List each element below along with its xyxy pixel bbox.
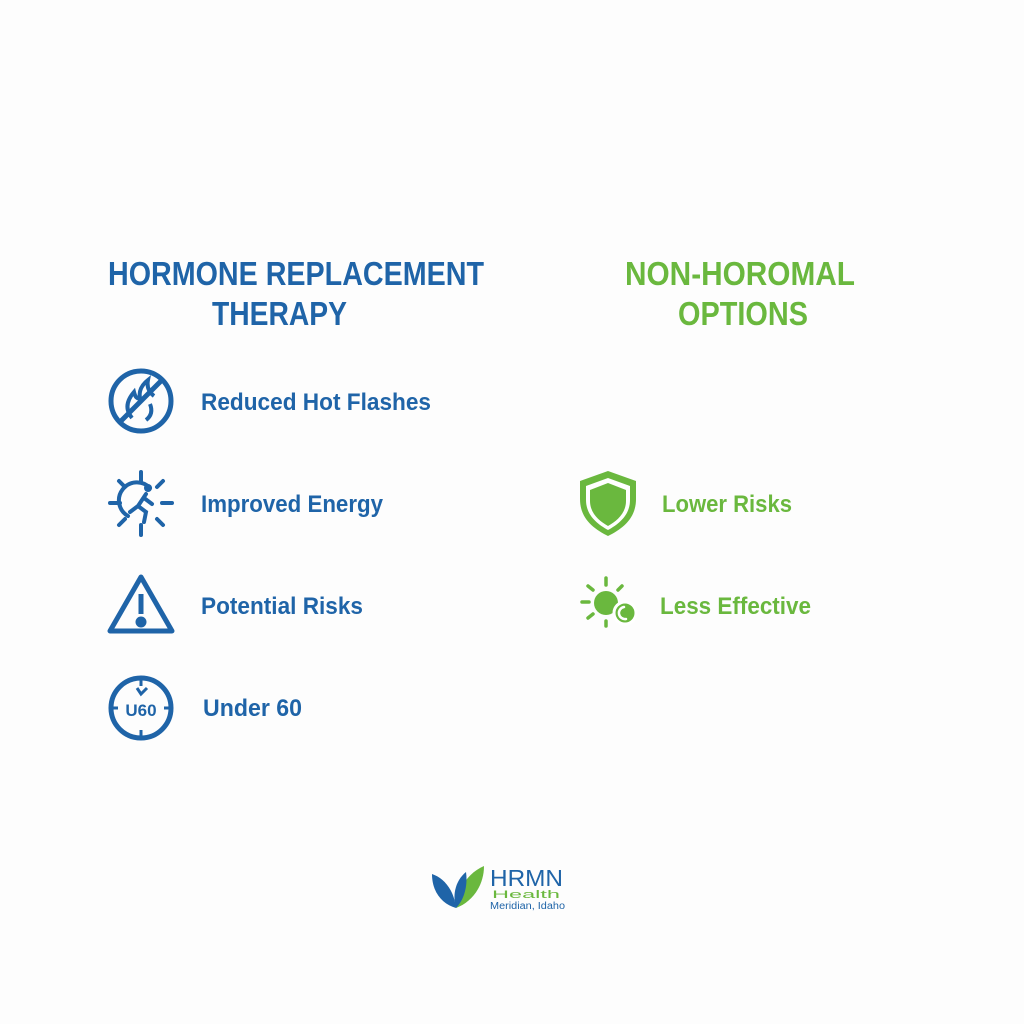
logo: HRMN Health: HRMN	[490, 865, 563, 891]
text: improved energy: Improved Energy	[201, 491, 384, 518]
text: under 60: Under 60	[203, 695, 302, 722]
icon: warning	[110, 577, 172, 631]
text: less effective: Less Effective	[660, 593, 811, 620]
icon: clock U60	[111, 678, 171, 738]
icon: clock U60: U60	[125, 701, 157, 720]
title: non-hormonal options	[625, 255, 855, 332]
text: potential risks: Potential Risks	[201, 593, 363, 620]
icon: no fire	[111, 371, 171, 431]
title: non-hormonal options: OPTIONS	[678, 295, 808, 332]
logo: HRMN Health	[432, 865, 565, 912]
text: reduced hot flashes: Reduced Hot Flashes	[201, 389, 431, 416]
title: hormone replacement therapy: HORMONE REPLACEMENT	[108, 255, 484, 292]
icon: energy runner	[110, 472, 172, 535]
title: non-hormonal options: NON-HOROMAL	[625, 255, 855, 292]
logo: HRMN Health: Health	[492, 889, 560, 901]
logo: HRMN Health: Meridian, Idaho	[490, 901, 565, 912]
title: hormone replacement therapy: THERAPY	[212, 295, 347, 332]
text: lower risks: Lower Risks	[662, 491, 792, 518]
title: hormone replacement therapy	[108, 255, 484, 332]
icon: sun and moon	[582, 578, 636, 626]
icon: shield	[580, 471, 636, 536]
